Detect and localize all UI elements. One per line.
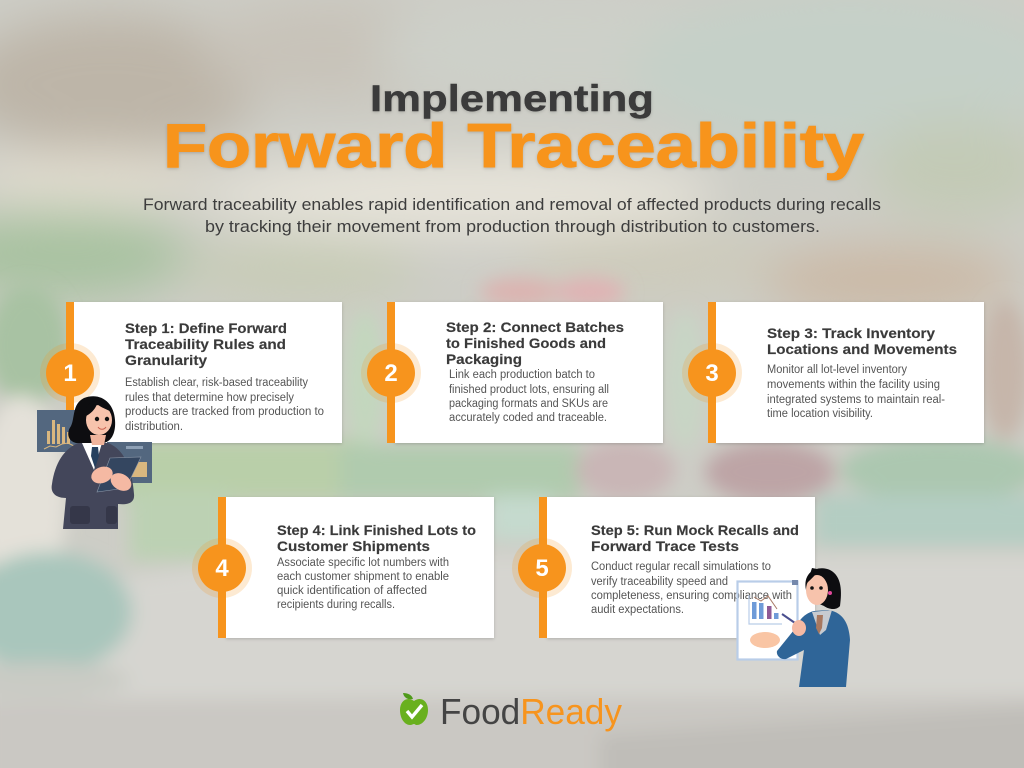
step 4 heading <box>277 522 476 554</box>
title line: Forward Traceability: Forward Traceability <box>163 112 865 181</box>
illustration: businesswoman with tablet and dashboards <box>37 396 152 529</box>
step 5 number badge: 5 <box>535 555 549 582</box>
hair back <box>68 396 115 443</box>
bar chart on board <box>749 595 782 624</box>
step 1 body <box>125 377 324 433</box>
pockets <box>70 506 90 524</box>
step 5 heading: Step 5: Run Mock Recalls and <box>591 522 799 538</box>
hair <box>805 568 841 609</box>
step 3 body: time location visibility. <box>767 408 873 420</box>
step 1 heading: Step 1: Define Forward <box>125 320 287 336</box>
title line: Implementing: Implementing <box>370 78 654 119</box>
step 3 heading: Step 3: Track Inventory <box>767 325 935 341</box>
step 1 body: products are tracked from production to <box>125 406 324 418</box>
step 3 heading <box>767 325 957 357</box>
step 3 heading: Locations and Movements <box>767 341 957 357</box>
chart board <box>737 580 798 660</box>
pointing hand and pointer <box>782 614 795 623</box>
step 4 body: Associate specific lot numbers with <box>277 557 449 569</box>
step 4 number badge <box>192 538 252 598</box>
step 4 body: each customer shipment to enable <box>277 571 449 583</box>
shirt and tie <box>82 443 102 470</box>
apple icon <box>400 693 428 725</box>
step 1 heading: Traceability Rules and <box>125 336 286 352</box>
step 5 body: audit expectations. <box>591 604 684 616</box>
step 3 body <box>767 364 945 420</box>
hands <box>89 464 115 486</box>
panel: step 1 <box>40 302 342 443</box>
wordmark: FoodReady <box>440 691 622 732</box>
title <box>163 78 865 181</box>
step 4 body: recipients during recalls. <box>277 599 395 611</box>
step 2 body: packaging formats and SKUs are <box>449 398 608 410</box>
logo: FoodReady <box>400 691 622 732</box>
step 2 body: finished product lots, ensuring all <box>449 384 609 396</box>
suit jacket <box>52 443 134 529</box>
dashboard panel left <box>37 410 79 452</box>
step 5 number badge <box>512 538 572 598</box>
step 4 heading: Customer Shipments <box>277 538 430 554</box>
step 2 number badge: 2 <box>384 360 398 387</box>
face <box>86 405 112 435</box>
step 2 heading: Step 2: Connect Batches <box>446 319 624 335</box>
step 1 body: distribution. <box>125 421 183 433</box>
step 5 body: completeness, ensuring compliance with <box>591 590 792 602</box>
intro paragraph: Forward traceability enables rapid identification and removal of affected products during recalls <box>143 195 881 214</box>
step 1 number badge: 1 <box>63 360 77 387</box>
step 5 heading <box>591 522 799 554</box>
intro paragraph: by tracking their movement from production through distribution to customers. <box>205 217 820 236</box>
step 5 heading: Forward Trace Tests <box>591 538 739 554</box>
step 1 body: rules that determine how precisely <box>125 392 294 404</box>
step 5 body <box>591 561 792 616</box>
step 2 body: Link each production batch to <box>449 369 595 381</box>
step 1 heading: Granularity <box>125 352 207 368</box>
step 2 heading: to Finished Goods and <box>446 335 606 351</box>
panel: step 2 <box>361 302 663 443</box>
step 3 body: movements within the facility using <box>767 379 940 391</box>
step 4 body <box>277 557 449 611</box>
step 5 body: verify traceability speed and <box>591 576 728 588</box>
open hand <box>750 632 780 648</box>
tablet <box>97 457 141 492</box>
step 1 body: Establish clear, risk-based traceability <box>125 377 308 389</box>
panel: step 3 <box>682 302 984 443</box>
suit <box>777 610 850 687</box>
intro paragraph <box>143 195 881 236</box>
step 4 heading: Step 4: Link Finished Lots to <box>277 522 476 538</box>
step 2 heading: Packaging <box>446 351 522 367</box>
wood tabletop <box>0 555 1024 710</box>
step 2 body <box>449 369 609 424</box>
step 2 number badge <box>361 343 421 403</box>
step 1 heading <box>125 320 287 368</box>
step 3 body: Monitor all lot-level inventory <box>767 364 907 376</box>
step 4 number badge: 4 <box>215 555 229 582</box>
panel: step 4 <box>192 497 494 638</box>
dashboard panel right <box>107 442 152 483</box>
step 3 body: integrated systems to maintain real- <box>767 394 945 406</box>
step 3 number badge <box>682 343 742 403</box>
shirt and tie <box>812 610 832 635</box>
illustration: presenter with chart board <box>737 568 850 687</box>
step 1 number badge <box>40 343 100 403</box>
step 2 body: accurately coded and traceable. <box>449 412 607 424</box>
step 2 heading <box>446 319 624 367</box>
panel: step 5 <box>512 497 815 638</box>
face <box>806 575 828 605</box>
step 4 body: quick identification of affected <box>277 585 427 597</box>
step 3 number badge: 3 <box>705 360 719 387</box>
step 5 body: Conduct regular recall simulations to <box>591 561 771 573</box>
